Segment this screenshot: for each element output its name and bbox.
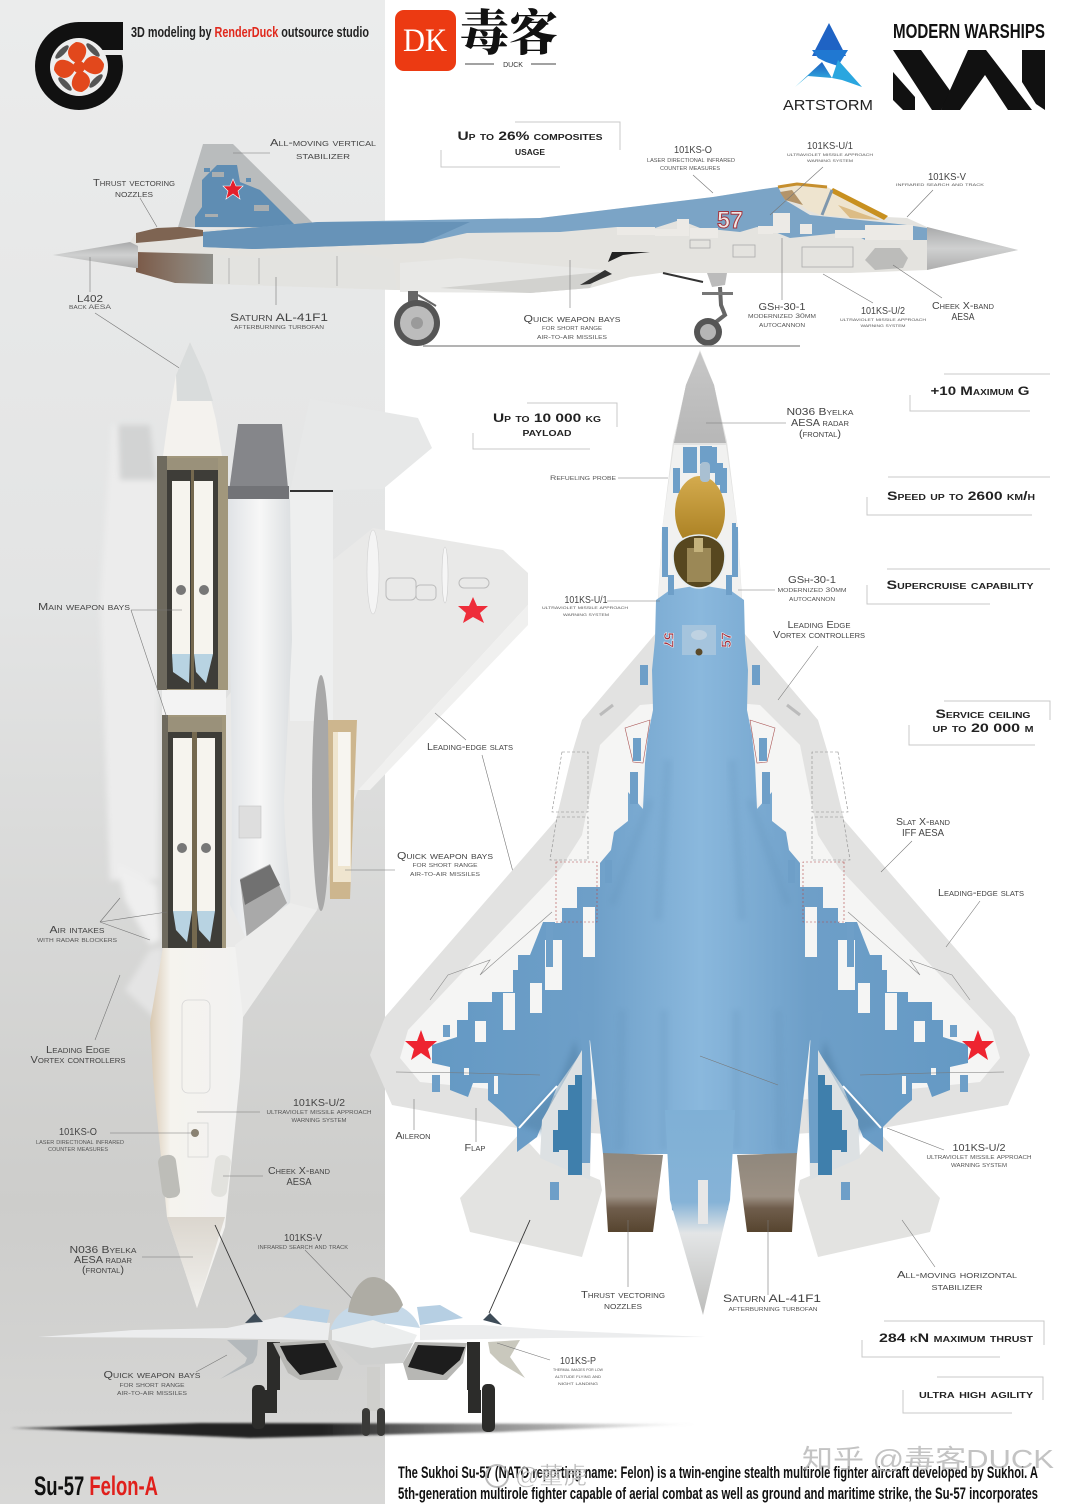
labels: side view: counter measures	[660, 165, 721, 172]
watermark: zhihu: 知乎 @毒客DUCK	[802, 1444, 1055, 1474]
panel: left gray background	[0, 0, 385, 1504]
labels: top view: ultraviolet missile approach	[542, 605, 628, 611]
labels: top view: ultraviolet missile approach	[926, 1154, 1032, 1161]
nose dorsal probe	[700, 462, 710, 482]
fin: camouflaged	[178, 144, 318, 228]
labels: front view: 101KS-P	[560, 1356, 596, 1367]
callout: speed: Speed up to 2600 km/h	[887, 489, 1035, 503]
labels: side view: back AESA	[69, 304, 112, 311]
labels: top view: Thrust vectoring	[581, 1290, 665, 1301]
callout: service ceiling	[909, 701, 1050, 745]
body nose	[163, 342, 222, 456]
watermark: weibo: @董虎	[515, 1463, 587, 1490]
labels: top view: nozzles	[604, 1301, 642, 1312]
star left wing	[405, 1030, 437, 1060]
labels: side view: 101KS-U/2	[861, 306, 905, 317]
ground shadow	[10, 1423, 700, 1438]
labels: underside view: 101KS-U/2	[293, 1098, 345, 1109]
nose cone	[927, 227, 1018, 270]
labels: underside view: 101KS-O	[59, 1127, 97, 1138]
blue upper fuselage	[203, 187, 927, 249]
callout: agility	[903, 1377, 1043, 1413]
dorsal sensor	[682, 625, 716, 656]
labels: underside view: Main weapon bays	[38, 602, 130, 613]
title: Su-57 Felon-A: Su-57 Felon-A	[34, 1471, 158, 1501]
callout: speed	[867, 477, 1050, 515]
main gear right	[467, 1342, 495, 1432]
labels: front view: night landing	[558, 1381, 598, 1387]
labels: underside view: Cheek X-band	[268, 1166, 330, 1177]
labels: underside view: AESA radar	[74, 1255, 132, 1266]
wing	[225, 528, 528, 1017]
rear body	[150, 947, 243, 1308]
labels: side view: 101KS-V	[928, 172, 966, 183]
fuselage blue-white upper	[330, 1300, 420, 1330]
labels: side view: Quick weapon bays	[524, 314, 621, 325]
stinger tail cone	[53, 242, 138, 268]
side quick weapon bay	[312, 675, 357, 911]
callout: agility: ultra high agility	[919, 1387, 1034, 1401]
labels: side view: nozzles	[115, 189, 153, 200]
box fairing	[290, 491, 333, 721]
labels: underside view: counter measures	[48, 1146, 109, 1153]
callout: maximum thrust: 284 kN maximum thrust	[879, 1331, 1033, 1345]
labels: side view: 101KS-O	[674, 145, 712, 156]
vertical tails	[245, 1313, 263, 1323]
labels: side view: stabilizer	[296, 151, 350, 162]
aircraft: side view	[53, 144, 1018, 346]
labels: side view: ultraviolet missile approach	[840, 317, 926, 323]
labels: top view: afterburning turbofan	[728, 1306, 818, 1313]
callout: composites usage: Up to 26% composites	[458, 129, 603, 143]
labels: top view: All-moving horizontal	[897, 1270, 1017, 1281]
labels: underside view: for short range	[412, 862, 478, 869]
labels: underside view: air-to-air missiles	[410, 871, 481, 878]
red star on wing	[458, 597, 488, 623]
nacelle	[228, 424, 292, 940]
labels: side view: ultraviolet missile approach	[787, 152, 873, 158]
labels: side view: warning system	[807, 158, 853, 164]
labels: underside view: Vortex controllers	[30, 1055, 126, 1066]
cheek radar panel	[865, 248, 908, 270]
logo: Artstorm	[783, 23, 873, 114]
labels: front view: altitude flying and	[555, 1374, 601, 1380]
fuselage nose	[332, 1320, 417, 1363]
labels: top view: warning system	[951, 1162, 1007, 1169]
labels: side view: infrared search and track	[896, 182, 984, 188]
labels: top view: GSh-30-1	[788, 575, 836, 586]
labels: top view: Slat X-band	[896, 817, 950, 828]
side number right: 57	[718, 632, 734, 648]
labels: side view: AESA	[952, 312, 975, 323]
labels: side view: afterburning turbofan	[234, 324, 325, 331]
labels: side view: Saturn AL-41F1	[230, 312, 328, 324]
lower weapon bay	[162, 715, 226, 948]
aircraft: front view	[10, 1277, 706, 1438]
intakes	[273, 1340, 343, 1380]
labels: top view: Vortex controllers	[773, 630, 865, 641]
labels: underside view: for short range	[120, 1382, 185, 1389]
logo: DK duck: 毒客	[460, 6, 558, 61]
labels: top view: N036 Byelka	[786, 407, 854, 418]
main landing gear	[394, 291, 440, 346]
canopy front	[348, 1277, 403, 1316]
labels: top view: Leading Edge	[788, 620, 851, 631]
labels: underside view: with radar blockers	[37, 937, 118, 944]
cockpit canopy	[673, 476, 725, 588]
labels: underside view: ultraviolet missile approach	[266, 1109, 372, 1116]
star on fin	[223, 179, 243, 199]
logo: Artstorm: ARTSTORM	[783, 97, 873, 114]
labels: underside view: 101KS-V	[284, 1233, 322, 1244]
logo: DK duck: DK	[403, 23, 447, 59]
nose gear	[362, 1367, 385, 1436]
callout: service ceiling: Service ceiling	[936, 707, 1030, 721]
callout: service ceiling: up to 20 000 m	[932, 721, 1034, 735]
labels: underside view: (frontal)	[82, 1265, 124, 1276]
nose landing gear	[694, 273, 733, 346]
callout: maximum thrust	[862, 1321, 1044, 1357]
tail nozzle	[136, 252, 213, 284]
labels: top view: stabilizer	[932, 1282, 982, 1293]
callout: supercruise: Supercruise capability	[886, 578, 1034, 592]
labels: top view	[396, 407, 1032, 1313]
callout: composites usage	[441, 122, 620, 167]
labels: underside view: Quick weapon bays	[104, 1370, 201, 1381]
labels: top view: modernized 30mm	[778, 587, 846, 594]
labels: side view: modernized 30mm	[748, 313, 816, 320]
callout: maximum G	[910, 374, 1050, 411]
labels: top view: 101KS-U/2	[952, 1143, 1006, 1154]
labels: side view: Cheek X-band	[932, 301, 994, 312]
aircraft: top view	[370, 350, 1030, 1315]
tail stinger	[665, 1110, 735, 1315]
brown nozzle fairing	[136, 227, 203, 243]
studio credit text: 3D modeling by RenderDuck outsource studio	[131, 24, 369, 41]
labels: top view: Aileron	[396, 1131, 430, 1142]
labels: front view	[497, 1343, 603, 1387]
labels: underside view: Leading-edge slats	[427, 742, 513, 753]
labels: underside view	[30, 602, 517, 1397]
labels: side view: All-moving vertical	[270, 138, 376, 149]
logo: Modern Warships	[893, 21, 1045, 110]
callout: payload: payload	[522, 425, 572, 439]
labels: top view: (frontal)	[799, 429, 841, 440]
labels: side view: 101KS-U/1	[807, 141, 853, 152]
upper weapon bay	[157, 456, 228, 690]
labels: side view: GSh-30-1	[758, 302, 806, 313]
labels: side view: Thrust vectoring	[93, 178, 175, 189]
logo: DK duck	[395, 6, 558, 71]
labels: side view	[69, 138, 994, 375]
labels: top view: Leading-edge slats	[938, 888, 1024, 899]
labels: top view: Refueling probe	[550, 475, 617, 482]
side numbers: 57	[661, 632, 677, 648]
labels: top view: AESA radar	[791, 418, 849, 429]
ventral fins	[220, 1340, 525, 1379]
callout: supercruise	[867, 569, 1050, 604]
wings	[38, 1317, 330, 1340]
labels: underside view: infrared search and track	[258, 1244, 349, 1251]
callout: maximum G: +10 Maximum G	[930, 384, 1030, 398]
labels: underside view: AESA	[286, 1177, 312, 1188]
labels: side view: L402	[77, 294, 104, 305]
labels: front view: thermal images for low	[553, 1367, 603, 1373]
star right wing	[962, 1030, 994, 1060]
labels: top view: 101KS-U/1	[564, 595, 608, 606]
labels: underside view: Quick weapon bays	[397, 851, 493, 862]
logo: RenderDuck studio	[35, 22, 123, 110]
callout: payload	[473, 403, 617, 449]
labels: top view: warning system	[563, 612, 609, 618]
callout: payload: Up to 10 000 kg	[493, 411, 601, 425]
callout: composites usage: usage	[515, 144, 546, 158]
engine nacelle	[215, 252, 397, 290]
labels: side view: air-to-air missiles	[537, 334, 608, 341]
labels: underside view: air-to-air missiles	[117, 1390, 188, 1397]
tailplane	[290, 399, 432, 491]
labels: side view: autocannon	[759, 322, 806, 329]
logo: DK duck: DUCK	[503, 62, 523, 69]
labels: underside view: N036 Byelka	[70, 1245, 137, 1256]
labels: top view: autocannon	[789, 596, 836, 603]
faded far-side body	[100, 425, 163, 1023]
labels: underside view: Leading Edge	[46, 1045, 110, 1056]
labels: underside view: warning system	[292, 1117, 346, 1124]
labels: top view: IFF AESA	[902, 828, 944, 839]
labels: underside view: laser directional infrared	[36, 1139, 124, 1146]
aircraft: underside with open bays	[100, 342, 528, 1308]
intro text	[398, 1464, 1038, 1503]
labels: side view: warning system	[860, 323, 906, 329]
labels: side view: laser directional infrared	[647, 157, 735, 164]
canopy	[778, 184, 888, 220]
side number 57: 57	[717, 207, 743, 234]
nose patches	[700, 446, 736, 563]
main gear left	[252, 1342, 280, 1429]
labels: underside view: Air intakes	[50, 925, 105, 936]
labels: top view: Saturn AL-41F1	[723, 1293, 821, 1305]
labels: top view: Flap	[464, 1143, 486, 1154]
labels: side view: for short range	[542, 325, 603, 332]
sensor dot	[191, 1129, 199, 1137]
